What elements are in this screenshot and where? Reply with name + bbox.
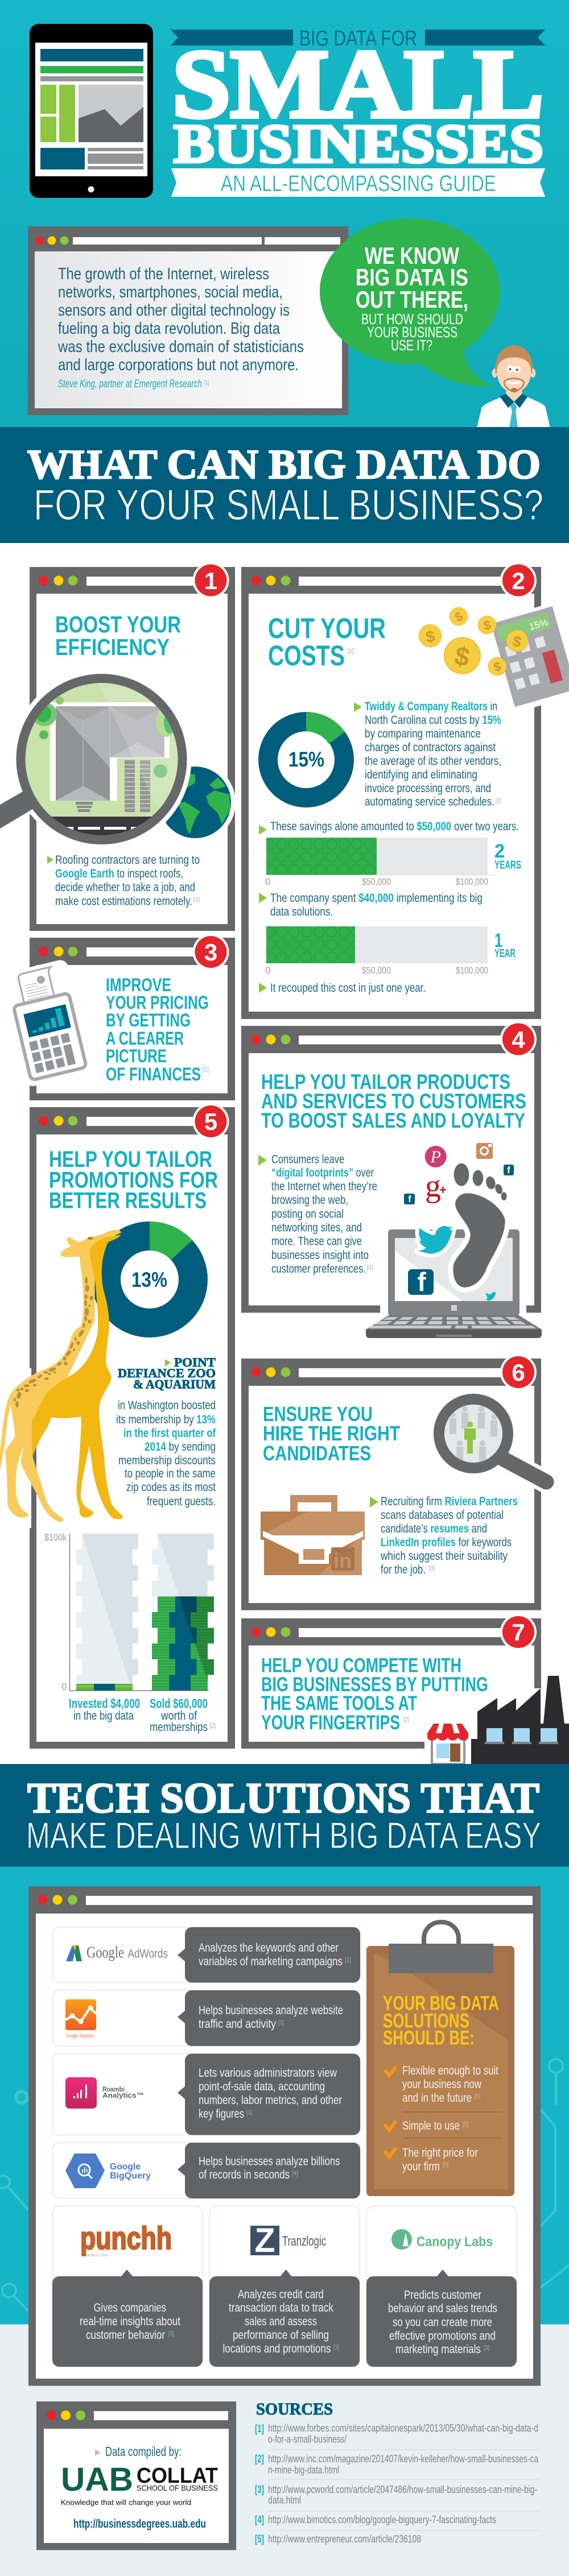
callout: speech bubble: WE KNOW xyxy=(365,242,459,269)
panel: intro quote window: was the exclusive domain of statisticians xyxy=(57,338,304,356)
heading: BIG BUSINESSES BY PUTTING xyxy=(261,1674,488,1696)
heading: CANDIDATES xyxy=(263,1442,371,1465)
text: riviera partners: which suggest their suitability xyxy=(380,1550,508,1563)
bar chart: 2 years: 0 xyxy=(265,876,270,887)
text: company spent xyxy=(259,892,483,918)
heading xyxy=(55,611,181,660)
logo: UAB Collat: Knowledge that will change your world xyxy=(61,2498,191,2507)
card: google adwords: Analyzes the keywords and other xyxy=(199,1941,339,1954)
heading: YOUR FINGERTIPS xyxy=(261,1712,400,1734)
bar chart: 1 year: 0 xyxy=(265,965,270,976)
logo: UAB Collat: COLLAT xyxy=(137,2464,218,2488)
chart: stacks of bills: 0 xyxy=(61,1682,67,1692)
card: punchh: Gives companies xyxy=(93,2301,166,2314)
chart: stacks of bills: Sold $60,000 xyxy=(150,1696,208,1711)
icon: laptop xyxy=(366,1229,542,1338)
clipboard: solutions checklist: [5] xyxy=(463,2121,468,2128)
text: twiddy: by comparing maintenance xyxy=(365,727,481,740)
heading: A CLEARER xyxy=(106,1028,184,1049)
clipboard: solutions checklist: Simple to use xyxy=(402,2119,460,2132)
panel: intro quote window: Steve King, partner at Emergent Research xyxy=(58,378,202,390)
icon: social media: g xyxy=(425,1169,441,1204)
card: roambi analytics: numbers, labor metrics, and other xyxy=(199,2094,342,2107)
text: point defiance: its membership by 13% xyxy=(116,1413,216,1426)
sources: http://www.bimotics.com/blog/google-bigquery-7-fascinating-facts xyxy=(268,2514,496,2525)
callout: speech bubble: BUT HOW SHOULD xyxy=(361,310,463,328)
text: riviera partners: [3] xyxy=(429,1565,435,1572)
card: roambi analytics: point-of-sale data, accounting xyxy=(199,2080,325,2093)
heading: HELP YOU COMPETE WITH xyxy=(261,1655,461,1676)
text: twiddy: automating service schedules. xyxy=(365,795,494,809)
text: digital footprints: businesses insight into xyxy=(271,1249,369,1262)
section band: what can big data do: WHAT CAN BIG DATA DO xyxy=(27,441,541,487)
text: point defiance xyxy=(116,1355,216,1508)
icon: receipt calculator xyxy=(0,958,93,1088)
chart: 15% donut: 15% xyxy=(288,748,324,771)
callout: speech bubble: OUT THERE, xyxy=(356,286,468,313)
card: punchh xyxy=(52,2206,203,2367)
card: canopy labs: [3] xyxy=(484,2345,489,2351)
text: roofing contractors: Google Earth to inspect roofs, xyxy=(55,867,183,880)
panel 7: compete with big businesses xyxy=(241,1614,542,1749)
text: company spent: The company spent $40,000 implementing its big xyxy=(270,892,483,905)
card: tranzlogic xyxy=(209,2206,360,2367)
badge 1: 1 xyxy=(204,568,217,594)
text: roofing contractors: decide whether to take a job, and xyxy=(55,881,195,894)
clipboard: solutions checklist: your firm xyxy=(402,2160,440,2173)
panel: intro quote window: fueling a big data revolution. Big data xyxy=(58,320,281,338)
bar chart: 2 years: $100,000 xyxy=(456,876,488,887)
text: point defiance: in the first quarter of xyxy=(123,1427,216,1440)
title: BIG DATA FOR xyxy=(299,27,417,51)
text: digital footprints: networking sites, and xyxy=(271,1221,362,1234)
text: digital footprints xyxy=(258,1153,377,1275)
icon: tablet xyxy=(30,24,153,198)
icon: coins: $ xyxy=(452,640,472,672)
card: tranzlogic: sales and assess xyxy=(245,2315,317,2328)
text: point defiance: 2014 by sending xyxy=(145,1440,216,1453)
icon: coins: $ xyxy=(511,632,523,651)
heading: BY GETTING xyxy=(106,1010,191,1030)
title xyxy=(171,27,545,197)
card: canopy labs: Canopy Labs xyxy=(417,2234,493,2250)
right stack xyxy=(152,1534,214,1596)
icon: coins: $ xyxy=(452,609,465,624)
card: roambi analytics: key figures xyxy=(199,2107,244,2121)
card: canopy labs: Predicts customer xyxy=(404,2288,481,2302)
text: roofing contractors: [1] xyxy=(193,896,200,903)
text: riviera partners: for the job. xyxy=(381,1563,426,1576)
bar chart: 2 years xyxy=(265,838,521,887)
badge 1 xyxy=(192,562,229,598)
sources xyxy=(255,2400,539,2545)
heading: THE SAME TOOLS AT xyxy=(261,1692,417,1714)
sources: data.html xyxy=(268,2494,301,2505)
heading xyxy=(49,1147,218,1214)
card: tranzlogic: transaction data to track xyxy=(229,2301,333,2314)
icon: magnifying glass with people xyxy=(439,1399,546,1482)
title: AN ALL-ENCOMPASSING GUIDE xyxy=(221,171,496,196)
card: google analytics: [3] xyxy=(278,2019,284,2026)
card: tranzlogic: performance of selling xyxy=(233,2329,329,2342)
section band: tech solutions: TECH SOLUTIONS THAT xyxy=(27,1775,539,1822)
badge 2: 2 xyxy=(512,568,525,594)
logo: UAB Collat: SCHOOL OF BUSINESS xyxy=(137,2483,218,2492)
badge 7 xyxy=(500,1614,537,1650)
icon: coins: $ xyxy=(483,618,492,633)
card: google adwords: AdWords xyxy=(127,1947,168,1961)
chart: 15% donut xyxy=(268,712,345,798)
callout: speech bubble xyxy=(320,218,500,386)
text: riviera partners: candidate’s resumes and xyxy=(381,1522,487,1535)
badge 4 xyxy=(500,1021,537,1058)
heading: OF FINANCES xyxy=(106,1064,201,1084)
icon: social media: f xyxy=(507,1165,510,1175)
icon: footprint xyxy=(453,1163,507,1287)
text: twiddy xyxy=(354,700,501,809)
badge 5 xyxy=(192,1103,229,1140)
badge 3: 3 xyxy=(204,939,217,966)
text: point defiance: membership discounts xyxy=(118,1454,216,1467)
card: punchh: [3] xyxy=(168,2330,174,2337)
panel: intro quote window: and large corporations but not anymore. xyxy=(58,356,299,374)
text: digital footprints: more. These can give xyxy=(271,1235,362,1248)
text: point defiance: in Washington boosted xyxy=(118,1399,216,1412)
panel: intro quote window: [1] xyxy=(204,379,209,386)
clipboard: solutions checklist xyxy=(366,1922,514,2196)
card: canopy labs: effective promotions and xyxy=(389,2329,496,2343)
logo: UAB Collat xyxy=(61,2461,218,2507)
heading: EFFICIENCY xyxy=(55,634,170,660)
icon: giraffe xyxy=(0,1230,123,1528)
badge 6: 6 xyxy=(512,1359,525,1386)
heading: PICTURE xyxy=(106,1046,167,1066)
card: roambi analytics: Analytics™ xyxy=(102,2091,144,2099)
panel 4: tailor products xyxy=(241,1021,542,1338)
section band: tech solutions xyxy=(0,1764,569,1866)
icon: factory xyxy=(470,1676,569,1764)
clipboard: solutions checklist: and in the future xyxy=(402,2092,472,2105)
panel: intro quote window: sensors and other digital technology is xyxy=(58,301,290,320)
card: punchh: real-time insights about xyxy=(80,2315,180,2328)
text: riviera partners xyxy=(370,1495,518,1576)
card: google bigquery xyxy=(52,2143,360,2198)
card: roambi analytics: [1] xyxy=(246,2109,252,2116)
badge 3 xyxy=(192,934,229,970)
sources: n-mine-big-data.html xyxy=(268,2465,339,2476)
text: point defiance: to people in the same xyxy=(125,1467,216,1480)
badge 4: 4 xyxy=(512,1026,525,1053)
card: canopy labs xyxy=(366,2206,517,2367)
clipboard: solutions checklist: [5] xyxy=(443,2161,448,2168)
callout: speech bubble: BIG DATA IS xyxy=(356,264,468,291)
tools section background xyxy=(0,1866,569,2325)
text: twiddy: invoice processing errors, and xyxy=(365,782,491,795)
clipboard: solutions checklist: your business now xyxy=(402,2078,482,2091)
text: digital footprints: [1] xyxy=(367,1264,373,1271)
text: savings: These savings alone amounted to $50,000 over two years. xyxy=(270,820,519,833)
panel 2: cut your costs xyxy=(241,562,569,1019)
sources: [5] xyxy=(255,2533,264,2545)
card: google adwords: variables of marketing campaigns xyxy=(199,1955,343,1968)
text: twiddy: identifying and eliminating xyxy=(365,768,477,781)
text: digital footprints: posting on social xyxy=(271,1208,344,1220)
clipboard: solutions checklist: The right price for xyxy=(402,2146,478,2160)
section band: what can big data do xyxy=(0,427,569,543)
heading: IMPROVE xyxy=(106,975,171,995)
text: digital footprints: browsing the web, xyxy=(271,1194,348,1207)
heading: COSTS xyxy=(268,640,345,672)
card: google analytics: Google Analytics xyxy=(66,2032,94,2039)
chart: stacks of bills: Invested $4,000 xyxy=(69,1696,140,1711)
clipboard: solutions checklist: Flexible enough to suit xyxy=(402,2064,498,2077)
card: tranzlogic: Tranzlogic xyxy=(282,2234,326,2249)
clipboard: solutions checklist: SOLUTIONS xyxy=(383,2010,469,2032)
icon: magnifying glass over roof xyxy=(0,669,191,849)
text: company spent: data solutions. xyxy=(270,905,333,918)
card: google analytics: Helps businesses analyze website xyxy=(199,2004,343,2017)
card: google adwords: [1] xyxy=(345,1957,351,1964)
heading xyxy=(268,612,386,672)
bar chart: 2 years: YEARS xyxy=(494,859,521,871)
icon: briefcase: in xyxy=(333,1549,352,1572)
clipboard: solutions checklist: SHOULD BE: xyxy=(383,2027,475,2049)
card: canopy labs: marketing materials xyxy=(395,2343,481,2356)
card: canopy labs: so you can create more xyxy=(393,2316,492,2329)
panel: intro quote window xyxy=(28,226,348,415)
card: google bigquery: Helps businesses analyze billions xyxy=(199,2155,340,2168)
card: tranzlogic: Z xyxy=(255,2221,275,2259)
text: point defiance: DEFIANCE ZOO xyxy=(118,1366,216,1380)
panel: intro quote window: networks, smartphones, social media, xyxy=(58,283,283,301)
heading: BETTER RESULTS xyxy=(49,1188,207,1214)
text: riviera partners: scans databases of potential xyxy=(381,1509,504,1522)
badge 6 xyxy=(500,1354,537,1390)
sources: [3] xyxy=(255,2484,264,2495)
card: google analytics xyxy=(52,1990,360,2046)
card: roambi analytics xyxy=(52,2054,360,2135)
title: SMALL xyxy=(172,30,543,138)
sources: SOURCES xyxy=(256,2400,333,2418)
left stack xyxy=(76,1534,138,1691)
chart: stacks of bills xyxy=(44,1532,216,1734)
text: digital footprints: the Internet when they’re xyxy=(271,1180,377,1193)
bar chart: 1 year: 1 xyxy=(494,930,502,951)
panel 5: tailor promotions xyxy=(0,1103,235,1749)
sources: http://www.entrepreneur.com/article/236108 xyxy=(268,2533,421,2545)
footer background xyxy=(0,2325,569,2576)
text: twiddy: North Carolina cut costs by 15% xyxy=(365,714,501,727)
text: point defiance: & AQUARIUM xyxy=(133,1377,216,1391)
text: twiddy: charges of contractors against xyxy=(365,741,496,754)
card: punchh: punchh xyxy=(80,2220,172,2256)
clipboard: solutions checklist: [5] xyxy=(475,2093,480,2100)
heading xyxy=(263,1402,400,1465)
card: tranzlogic: [3] xyxy=(333,2344,339,2351)
icon: social media: f xyxy=(417,1267,426,1297)
heading: YOUR PRICING xyxy=(106,992,209,1013)
sources: [2] xyxy=(255,2453,264,2465)
heading: PROMOTIONS FOR xyxy=(49,1168,218,1193)
icon: briefcase xyxy=(261,1495,365,1575)
chart: stacks of bills: $100k xyxy=(44,1532,67,1543)
heading: CUT YOUR xyxy=(268,612,386,644)
heading xyxy=(261,1655,488,1734)
icon: earth xyxy=(155,762,236,843)
heading: HELP YOU TAILOR PRODUCTS xyxy=(261,1070,510,1094)
card: google adwords: Google xyxy=(86,1944,124,1962)
card: punchh: MOBILE CRM xyxy=(86,2254,108,2258)
heading: [1] xyxy=(203,1066,209,1073)
heading: BOOST YOUR xyxy=(55,611,181,637)
panel 3: improve your pricing xyxy=(0,934,235,1100)
chart: stacks of bills: worth of xyxy=(160,1709,197,1722)
text: digital footprints: Consumers leave xyxy=(271,1153,344,1166)
logo: UAB Collat: UAB xyxy=(61,2461,133,2498)
chart: stacks of bills: in the big data xyxy=(73,1709,134,1722)
heading xyxy=(106,975,209,1084)
sources: o-for-a-small-business/ xyxy=(268,2434,347,2445)
bar chart: 1 year: $50,000 xyxy=(362,965,391,976)
panel: tools window xyxy=(28,1886,541,2386)
text: point defiance: zip codes as its most xyxy=(126,1481,216,1494)
panel 1: boost your efficiency xyxy=(0,562,236,931)
heading: [2] xyxy=(403,1716,409,1723)
bar chart: 2 years: $50,000 xyxy=(362,876,391,887)
card: google bigquery: BigQuery xyxy=(110,2171,151,2181)
panel: intro quote window: The growth of the Internet, wireless xyxy=(58,265,269,283)
sources: [1] xyxy=(255,2423,264,2434)
callout: speech bubble: YOUR BUSINESS xyxy=(367,324,457,341)
panel: data compiled by: http://businessdegrees.uab.edu xyxy=(73,2517,206,2531)
text: digital footprints: “digital footprints” over xyxy=(271,1166,374,1179)
heading: [1] xyxy=(348,648,354,655)
chart: 13% donut xyxy=(106,1221,193,1323)
bar chart: 1 year xyxy=(265,926,516,976)
circuit background pattern xyxy=(0,2059,569,2311)
icon: small shop xyxy=(424,1721,471,1764)
icon: social media: + xyxy=(439,1183,447,1197)
heading: HIRE THE RIGHT xyxy=(263,1422,400,1445)
text: twiddy: the average of its other vendors, xyxy=(365,755,501,768)
card: punchh: customer behavior xyxy=(86,2329,165,2342)
chart: stacks of bills: [2] xyxy=(209,1722,216,1729)
badge 2 xyxy=(500,562,537,598)
icon: coins xyxy=(419,607,528,676)
bar chart: 2 years: 2 xyxy=(494,840,505,862)
card: google adwords xyxy=(52,1927,360,1982)
bar chart: 1 year: YEAR xyxy=(494,947,516,960)
icon: coins: $ xyxy=(424,627,437,646)
text: twiddy: Twiddy & Company Realtors in xyxy=(365,700,497,713)
icon: calculator: 15% xyxy=(528,617,550,632)
card: roambi analytics: Lets various administrators view xyxy=(199,2066,337,2080)
card: google analytics: traffic and activity xyxy=(199,2018,276,2031)
chart: 13% donut: 13% xyxy=(131,1268,167,1291)
text: point defiance: POINT xyxy=(174,1355,216,1369)
header background xyxy=(0,0,569,427)
heading: ENSURE YOU xyxy=(263,1402,373,1426)
badge 7: 7 xyxy=(512,1619,525,1646)
badge 5: 5 xyxy=(204,1108,217,1135)
icon: man with tie xyxy=(477,345,550,427)
text: digital footprints: customer preferences. xyxy=(271,1262,366,1275)
bar chart: 1 year: $100,000 xyxy=(456,965,488,976)
sources: [4] xyxy=(255,2514,264,2525)
text: point defiance: frequent guests. xyxy=(147,1495,216,1508)
icon: social media xyxy=(404,1143,514,1301)
card: canopy labs: behavior and sales trends xyxy=(388,2302,497,2315)
panel 6: hire the right candidates xyxy=(241,1354,546,1610)
heading xyxy=(261,1070,526,1132)
text: roofing contractors: make cost estimations remotely. xyxy=(55,895,192,908)
card: google bigquery: of records in seconds xyxy=(199,2168,290,2181)
panel: data compiled by xyxy=(36,2401,236,2550)
callout: speech bubble: USE IT? xyxy=(391,337,432,354)
icon: social media: P xyxy=(430,1148,441,1166)
clipboard: solutions checklist: YOUR BIG DATA xyxy=(383,1993,499,2014)
card: tranzlogic: Analyzes credit card xyxy=(238,2288,324,2301)
text: riviera partners: Recruiting firm Riviera Partners xyxy=(381,1495,518,1508)
icon: calculator xyxy=(487,602,569,713)
card: google bigquery: [4] xyxy=(292,2170,298,2177)
title: BUSINESSES xyxy=(174,113,543,174)
icon: social media: f xyxy=(408,1194,411,1204)
text: recouped: It recouped this cost in just one year. xyxy=(270,981,426,995)
card: google bigquery: Google xyxy=(110,2162,141,2172)
card: tranzlogic: locations and promotions xyxy=(223,2342,331,2355)
text: roofing contractors xyxy=(47,854,200,908)
heading: HELP YOU TAILOR xyxy=(49,1147,212,1172)
text: riviera partners: LinkedIn profiles for keywords xyxy=(381,1536,512,1549)
chart: stacks of bills: memberships xyxy=(150,1721,208,1734)
card: roambi analytics: Roambi xyxy=(102,2085,125,2093)
panel: data compiled by: Data compiled by: xyxy=(105,2444,182,2459)
icon: coins: $ xyxy=(492,659,502,674)
text: roofing contractors: Roofing contractors are turning to xyxy=(55,854,200,867)
text: twiddy: [2] xyxy=(496,797,501,804)
